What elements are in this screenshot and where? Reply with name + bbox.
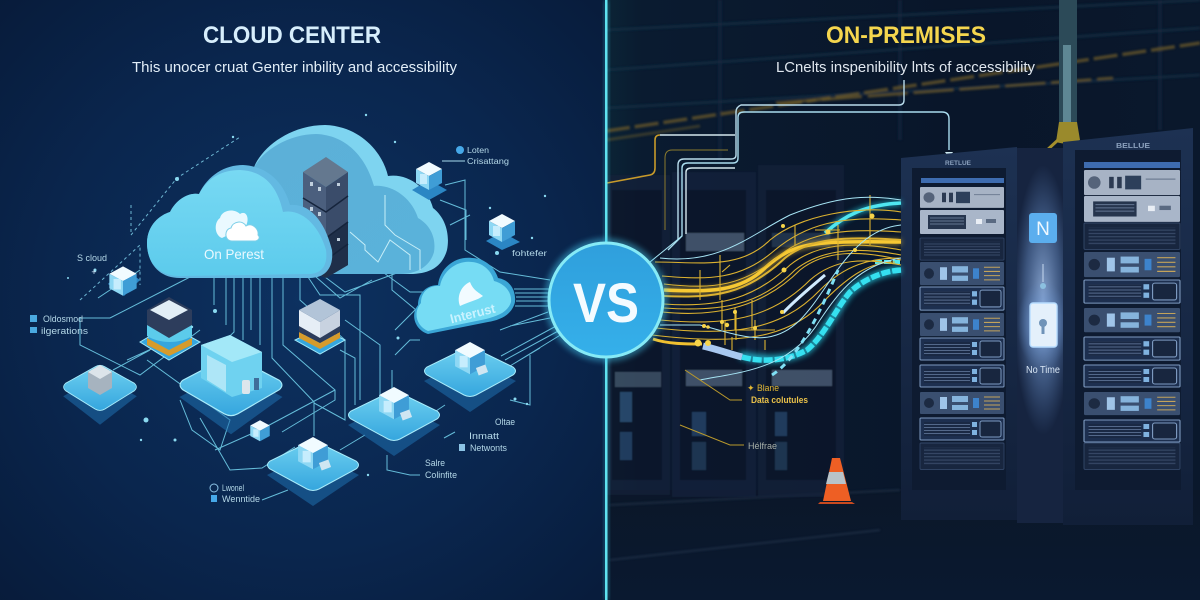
node: far-left platform	[63, 365, 137, 425]
rack: front-left server cabinet	[901, 147, 1017, 520]
callout: right-side data labels	[680, 370, 808, 451]
cloud: main front cloud	[147, 165, 332, 278]
node: bottom platform	[267, 437, 359, 506]
heading: on-premises: ON-PREMISES	[826, 22, 986, 49]
node: gold left server stack	[140, 297, 200, 360]
callout: networks label: Netwonts	[470, 443, 507, 453]
brand plate: BELLUE	[1116, 143, 1150, 150]
icon: traffic cone	[818, 458, 855, 504]
callout: bottom left label	[210, 483, 260, 504]
callout: bottom right label: Colinfite	[425, 470, 457, 480]
thick cables	[664, 242, 901, 291]
node: building platform	[179, 335, 283, 434]
panel: lit side panel between racks	[1013, 148, 1073, 523]
callout: bottom right label	[425, 458, 457, 480]
callout: cloud left label: S cloud	[77, 253, 107, 263]
callout: right-side data labels: ✦	[747, 383, 755, 393]
callout: top-right label: Loten	[467, 145, 489, 155]
VS badge: VS	[573, 271, 639, 334]
cable glow	[664, 203, 901, 359]
node: right small cube	[486, 214, 520, 250]
node: lower-left small cube	[250, 420, 270, 441]
node: gold right server stack	[295, 299, 345, 354]
callout: left integrations label: Oldosmod	[43, 314, 83, 324]
callout: top-right label: Crisattang	[467, 156, 509, 166]
callout: right label: fohtefer	[512, 248, 547, 258]
callout: bottom left label: Wenntide	[222, 494, 260, 504]
node: top-right small cube	[412, 162, 447, 200]
node: centre-right platform	[348, 387, 440, 456]
label: No Time: No Time	[1026, 365, 1060, 376]
icon: white cloud glyph	[216, 211, 259, 241]
callout: left integrations label	[30, 314, 89, 336]
heading: cloud center: CLOUD CENTER	[203, 22, 381, 49]
data cable bundle: cyan and yellow	[650, 195, 901, 380]
rack: front-right server cabinet	[1063, 128, 1193, 525]
VS badge	[544, 238, 668, 362]
circuit lines: top white routing	[607, 80, 953, 250]
icon: small cloud glyph	[459, 282, 483, 306]
cloud: large back cloud	[253, 125, 448, 274]
callout: cloud left label	[77, 253, 107, 277]
panel: cloud center background	[0, 0, 606, 600]
fine yellow cables	[652, 195, 901, 350]
label: cloud name: On Perest	[204, 246, 264, 262]
callout: bottom right label: Salre	[425, 458, 445, 468]
label: Interust: Interust	[449, 301, 497, 326]
callout: right-side data labels: Hélfrae	[748, 441, 777, 451]
callout: left integrations label: ilgerations	[41, 326, 89, 336]
icon: N tile: N	[1036, 219, 1050, 240]
icon: N tile	[1029, 213, 1057, 243]
cable nodes	[694, 214, 874, 346]
node: upper-left small cube	[108, 266, 140, 296]
callout: networks label: Inmatt	[469, 431, 500, 441]
callout: networks label: Oltae	[495, 417, 515, 427]
node: right platform	[424, 342, 516, 412]
cloud: internet cloud	[414, 258, 515, 334]
panel: background server racks	[606, 165, 844, 497]
callout: right-side data labels: Blane	[757, 383, 779, 394]
sparkle dots	[67, 114, 546, 476]
fine cyan and white cables	[650, 197, 901, 380]
subtitle: on-premises: LCnelts inspenibility lnts of accessibility	[776, 59, 1035, 76]
subtitle: cloud center: This unocer cruat Genter inbility and accessibility	[132, 59, 457, 76]
icon: keyhole lock	[1030, 303, 1057, 347]
brand plate: RETLUE	[945, 161, 971, 167]
cable dashes	[772, 270, 838, 375]
circuit lines: cloud network	[80, 180, 562, 500]
indicator line and dot	[1040, 264, 1046, 289]
panel: on-premises background	[606, 0, 1200, 600]
central divider line	[604, 0, 609, 600]
callout: top-right label	[442, 145, 509, 166]
callout: bottom left label: Lwonel	[222, 483, 244, 493]
decorative pipe	[1045, 0, 1080, 152]
icon: server tower	[303, 157, 348, 278]
arrow: into rack	[945, 152, 953, 158]
callout: networks label	[459, 417, 515, 453]
callout: right-side data labels: Data colutules	[751, 395, 808, 406]
dashed circuit lines	[80, 137, 240, 300]
callout: cloud left label: +	[91, 267, 97, 277]
